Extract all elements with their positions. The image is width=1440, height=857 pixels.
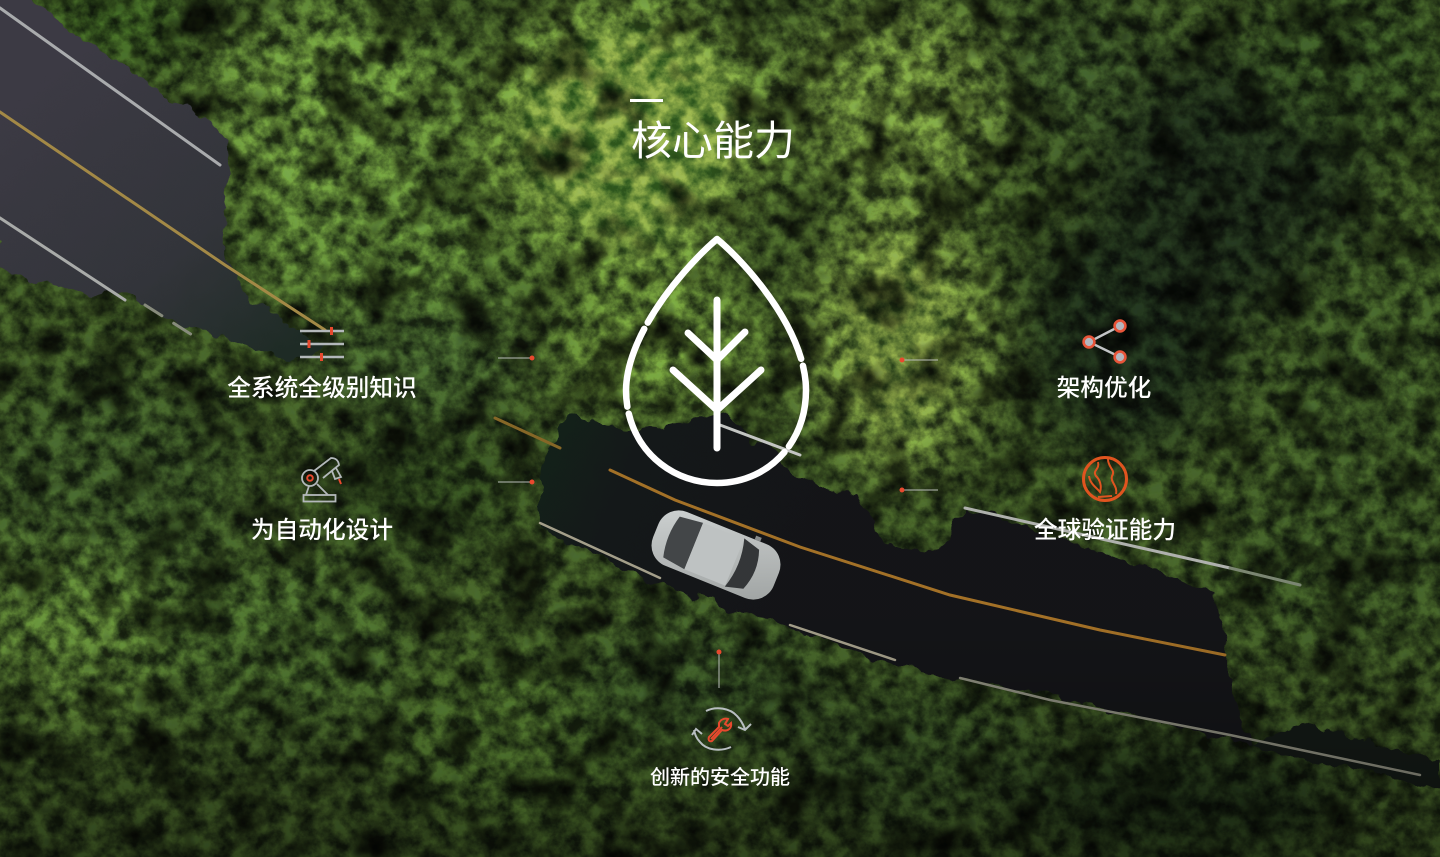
connector: bottom (716, 650, 722, 688)
icon: leaf with tree (626, 239, 806, 483)
label: innovative safety: 创新的安全功能 (650, 766, 790, 789)
icon: globe (1084, 458, 1126, 500)
icon: share nodes (1084, 321, 1125, 362)
label: global verification: 全球验证能力 (1034, 517, 1176, 544)
connector: middle right (900, 488, 938, 492)
icon: wrench with cycle arrows (692, 708, 751, 750)
label: architecture optimization: 架构优化 (1057, 375, 1151, 402)
icon: sliders (300, 327, 344, 361)
label: design for automation: 为自动化设计 (251, 517, 393, 544)
title: 核心能力 (631, 118, 795, 164)
connector: top left (498, 356, 534, 360)
car (645, 500, 789, 606)
label: full system knowledge: 全系统全级别知识 (227, 375, 417, 402)
icon: robot arm (302, 458, 341, 502)
connector: top right (900, 358, 938, 362)
connector: middle left (498, 480, 534, 484)
